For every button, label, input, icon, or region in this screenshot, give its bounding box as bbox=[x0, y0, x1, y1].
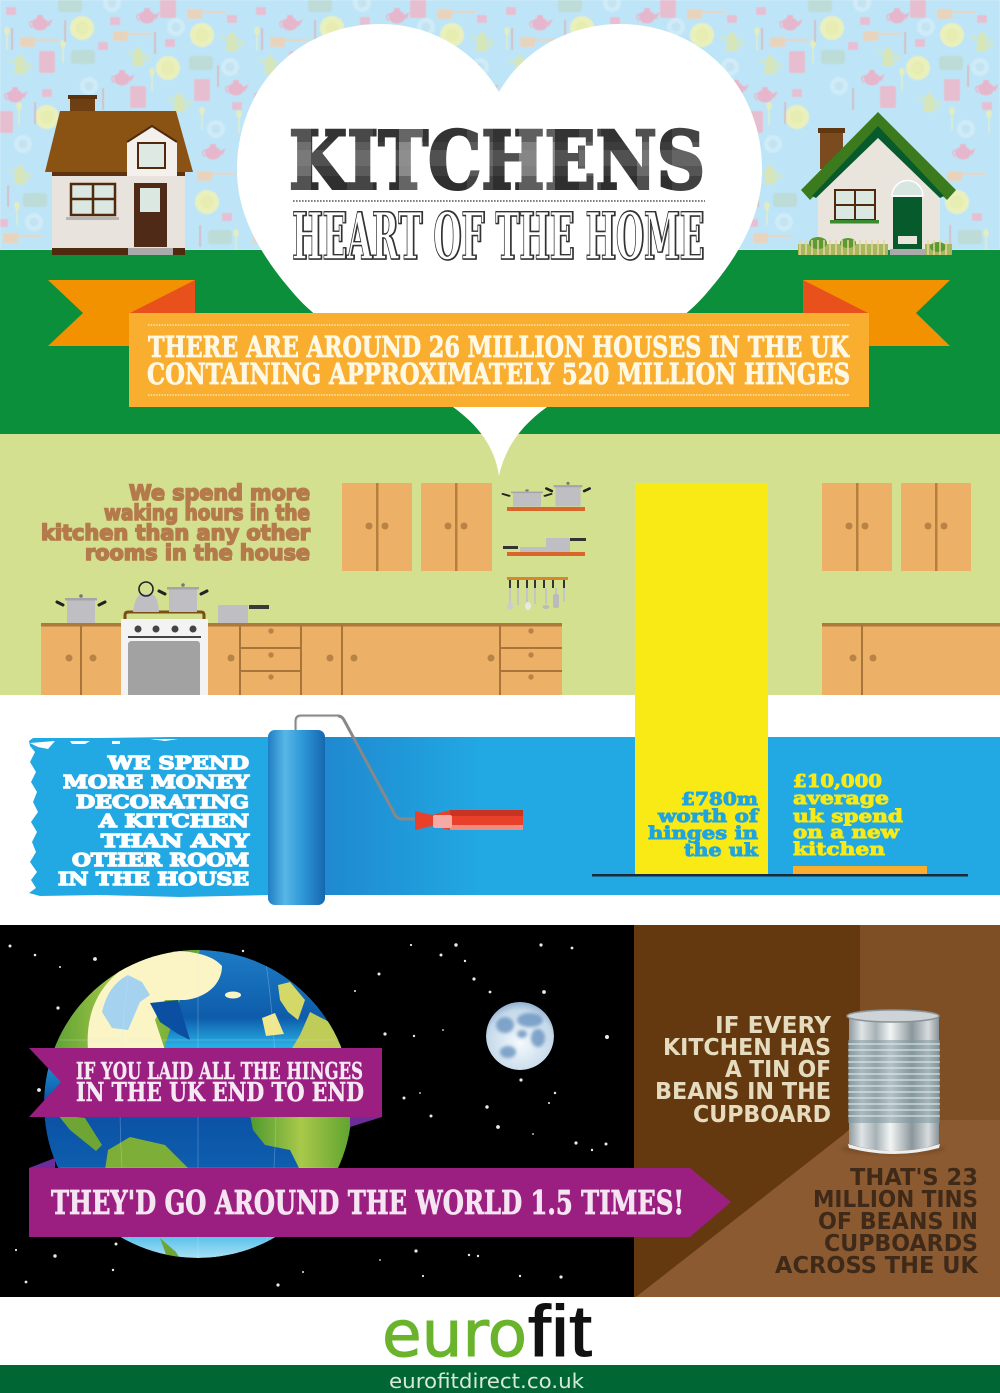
label: hinges value bbox=[648, 789, 759, 861]
background: lawn bbox=[0, 250, 1000, 434]
house: right bbox=[798, 112, 956, 255]
oven bbox=[121, 612, 208, 695]
label: kitchen spend: average bbox=[793, 788, 889, 809]
ribbon line 1: IF YOU LAID ALL THE HINGES bbox=[76, 1058, 363, 1085]
ribbon text: THEY'D GO AROUND THE WORLD 1.5 TIMES! bbox=[51, 1183, 684, 1222]
title line: Kitchens: KITCHENS bbox=[289, 114, 705, 208]
text: decorating: IN THE HOUSE bbox=[58, 869, 249, 890]
wall cabinets: left pair bbox=[342, 483, 492, 571]
panel: space bbox=[0, 925, 635, 1297]
text: decorating: DECORATING bbox=[76, 792, 249, 813]
bar: hinges value bbox=[635, 483, 768, 875]
text: 23 million tins: OF BEANS IN bbox=[818, 1209, 978, 1235]
footer: white strip bbox=[0, 1297, 1000, 1365]
pots on the counter bbox=[57, 582, 269, 623]
text: decorating: THAN ANY bbox=[101, 831, 251, 852]
globe bbox=[40, 950, 352, 1262]
text: 23 million tins: THAT'S 23 bbox=[850, 1165, 978, 1191]
text: 23 million tins: MILLION TINS bbox=[813, 1187, 978, 1213]
label: kitchen spend: £10,000 bbox=[793, 771, 882, 792]
text: waking hours bbox=[41, 481, 311, 565]
label: kitchen spend: on a new bbox=[793, 822, 900, 843]
text: decorating bbox=[58, 753, 251, 890]
counter: base units bbox=[41, 623, 562, 695]
ribbon line 2: IN THE UK END TO END bbox=[76, 1078, 364, 1108]
label: kitchen spend bbox=[793, 771, 903, 860]
text: waking hours: We spend more bbox=[129, 481, 310, 505]
panel: pantry bbox=[634, 925, 1000, 1297]
background: kitchen wall bbox=[0, 434, 1000, 695]
ribbon: around the world bbox=[29, 1158, 731, 1237]
text: tin in the cupboard: A TIN OF bbox=[725, 1057, 831, 1083]
text: waking hours: waking hours in the bbox=[104, 501, 310, 525]
title bbox=[289, 114, 705, 275]
wall cabinets: right pair bbox=[822, 483, 971, 571]
logo: eurofit: euro bbox=[382, 1298, 527, 1372]
label: kitchen spend: uk spend bbox=[793, 806, 903, 827]
text: waking hours: rooms in the house bbox=[85, 541, 310, 565]
chart baseline bbox=[592, 874, 968, 876]
right counter bbox=[822, 623, 1000, 695]
logo: eurofit bbox=[382, 1292, 592, 1372]
text: tin in the cupboard bbox=[655, 1013, 831, 1128]
banner: houses and hinges bbox=[129, 313, 869, 407]
ribbon: tails bbox=[48, 280, 950, 346]
logo: eurofit: fit bbox=[528, 1292, 592, 1372]
text: waking hours: kitchen than any other bbox=[41, 521, 311, 545]
background: white gap bbox=[0, 695, 1000, 925]
website address: eurofitdirect.co.uk bbox=[389, 1369, 584, 1393]
label: hinges value: £780m bbox=[681, 789, 758, 810]
text: tin in the cupboard: BEANS IN THE bbox=[655, 1079, 831, 1105]
text: decorating: A KITCHEN bbox=[98, 811, 249, 832]
label: hinges value: the uk bbox=[684, 840, 759, 861]
text: tin in the cupboard: KITCHEN HAS bbox=[663, 1035, 831, 1061]
text: 23 million tins: ACROSS THE UK bbox=[775, 1253, 979, 1279]
moon bbox=[486, 1002, 554, 1070]
tin of beans bbox=[841, 1010, 945, 1155]
bar: kitchen spend bbox=[793, 866, 927, 875]
text: decorating: OTHER ROOM bbox=[72, 850, 249, 871]
text: 23 million tins: CUPBOARDS bbox=[824, 1231, 978, 1257]
ribbon: hinges end to end bbox=[29, 1048, 382, 1127]
footer: green bar bbox=[0, 1365, 1000, 1393]
text: 23 million tins bbox=[775, 1165, 979, 1279]
background: wallpaper bbox=[0, 0, 1000, 250]
text: tin in the cupboard: CUPBOARD bbox=[693, 1102, 831, 1128]
utensil rack bbox=[507, 577, 568, 610]
label: hinges value: worth of bbox=[657, 806, 759, 827]
paint roller bbox=[268, 716, 523, 905]
label: hinges value: hinges in bbox=[648, 823, 758, 844]
shelves with pans bbox=[503, 482, 590, 556]
text: decorating: MORE MONEY bbox=[63, 772, 250, 793]
stars bbox=[8, 943, 609, 1287]
house: left bbox=[45, 95, 193, 255]
heart bbox=[237, 24, 762, 476]
label: kitchen spend: kitchen bbox=[793, 839, 885, 860]
text: decorating: WE SPEND bbox=[107, 753, 249, 774]
text: tin in the cupboard: IF EVERY bbox=[715, 1013, 831, 1039]
paint band bbox=[29, 737, 1000, 897]
